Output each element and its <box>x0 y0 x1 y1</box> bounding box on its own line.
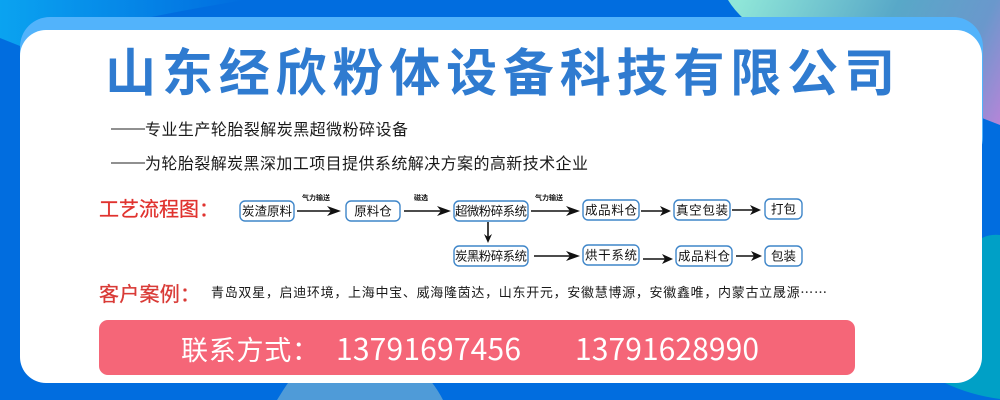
box: 成品料仓 top: 成品料仓 <box>585 204 637 218</box>
box: 炭黑粉碎系统: 炭黑粉碎系统 <box>455 248 527 264</box>
box: 烘干系统 <box>583 245 639 265</box>
arrow: 磁选 <box>404 193 451 216</box>
box: 烘干系统: 烘干系统 <box>585 248 637 262</box>
tagline 1: 专业生产轮胎裂解炭黑超微粉碎设备 <box>145 121 408 139</box>
arrow: 气力输送 1 <box>297 193 341 216</box>
heading: customers: 客户案例： <box>99 278 200 307</box>
arrow: lower 3 <box>736 251 762 261</box>
arrow: 磁选: 磁选 <box>414 193 428 202</box>
box: 成品料仓 bottom <box>676 246 732 266</box>
box: 原料仓 <box>346 201 400 221</box>
contact bar <box>99 320 855 375</box>
box: 包装: 包装 <box>771 250 796 264</box>
contact label: 联系方式： <box>181 329 319 368</box>
box: 原料仓: 原料仓 <box>354 204 392 218</box>
box: 打包: 打包 <box>771 202 796 216</box>
arrow: 气力输送 2 <box>531 193 580 216</box>
box: 炭黑粉碎系统 <box>454 246 528 266</box>
customer list: 青岛双星，启迪环境，上海中宝、威海隆茵达，山东开元，安徽慧博源，安徽鑫唯，内蒙古立晟源…… <box>211 282 827 301</box>
arrow: 气力输送 2: 气力输送 <box>535 193 563 202</box>
heading: process flow: 工艺流程图： <box>99 193 219 222</box>
arrow: 气力输送 1: 气力输送 <box>302 193 330 202</box>
arrow: top 3 <box>641 206 671 216</box>
box: 超微粉碎系统 <box>454 201 528 221</box>
phone 2: 13791628990 <box>575 325 759 369</box>
arrow: lower 1 <box>534 251 580 261</box>
title: 山东经欣粉体设备科技有限公司 <box>105 45 895 102</box>
process flow chart <box>240 193 802 266</box>
box: 炭渣原料 <box>240 201 294 221</box>
arrow: top 4 <box>732 205 761 215</box>
phone 1: 13791697456 <box>336 325 521 369</box>
box: 成品料仓 top <box>583 200 639 220</box>
arrow: down <box>484 222 492 243</box>
box: 炭渣原料: 炭渣原料 <box>242 204 292 218</box>
back card <box>20 17 983 167</box>
box: 打包 <box>765 199 802 219</box>
box: 真空包装 <box>674 200 730 220</box>
box: 真空包装: 真空包装 <box>676 204 728 218</box>
tagline 2: 为轮胎裂解炭黑深加工项目提供系统解决方案的高新技术企业 <box>145 155 588 173</box>
box: 包装 <box>765 246 802 266</box>
box: 成品料仓 bottom: 成品料仓 <box>678 250 730 264</box>
box: 超微粉碎系统: 超微粉碎系统 <box>455 204 527 218</box>
arrow: lower 2 <box>643 254 673 264</box>
